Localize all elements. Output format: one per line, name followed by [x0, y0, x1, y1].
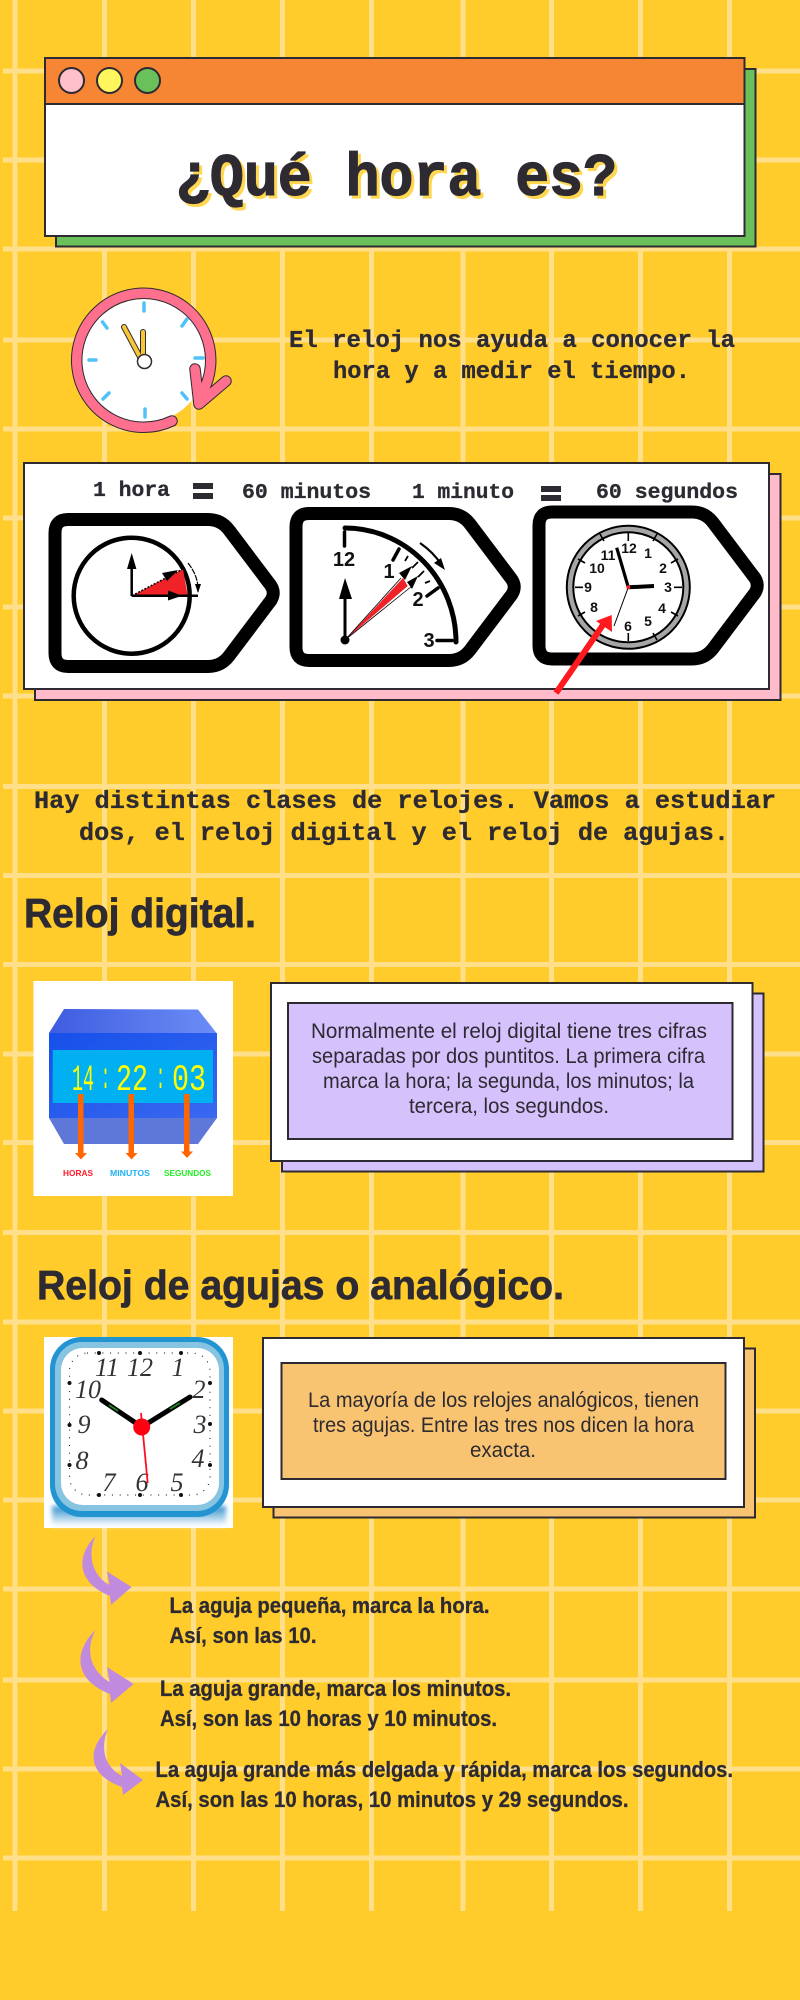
text: hour hand: La aguja pequeña, marca la hora. [170, 1593, 490, 1618]
diagram: one minute clock: 1 [644, 545, 652, 561]
image: analog clock: 12 [127, 1353, 153, 1382]
diagram: one minute clock: 11 [601, 547, 616, 563]
image: analog clock: 4 [192, 1444, 204, 1473]
text: second hand: La aguja grande más delgada y rápida, marca los segundos. [156, 1757, 733, 1782]
title: ¿Qué hora es? [176, 146, 617, 214]
text: analog description: exacta. [470, 1439, 536, 1462]
text block: intro: hora y a medir el tiempo. [333, 359, 690, 386]
window buttons [59, 68, 160, 93]
image: analog clock: 1 [172, 1353, 184, 1382]
image: analog clock: 6 [136, 1468, 148, 1497]
window body [45, 58, 744, 236]
text: minute hand: La aguja grande, marca los minutos. [160, 1676, 511, 1701]
text: minute hand [160, 1676, 511, 1731]
image: digital clock: 03 [172, 1060, 206, 1102]
label: 60 minutos: 60 minutos [242, 481, 371, 505]
diagram: five minutes clock: 2 [412, 589, 424, 611]
diagram: one minute clock: 12 [621, 540, 637, 556]
text: analog description: tres agujas. Entre las tres nos dicen la hora [313, 1414, 694, 1437]
diagram: one minute clock: 3 [664, 579, 672, 595]
text block: intro [289, 328, 735, 386]
image: digital clock: : [156, 1058, 165, 1100]
diagram: one minute clock: 9 [584, 579, 592, 595]
heading: reloj de agujas: Reloj de agujas o analógico. [37, 1262, 564, 1308]
image: analog clock: 9 [78, 1410, 90, 1439]
text: second hand: Así, son las 10 horas, 10 minutos y 29 segundos. [156, 1787, 628, 1812]
label: 1 minuto: 1 minuto [412, 481, 514, 505]
text: digital description: Normalmente el reloj digital tiene tres cifras [311, 1020, 707, 1043]
diagram: five minutes clock [296, 514, 514, 660]
arrow: second hand [94, 1729, 143, 1795]
heading: reloj digital: Reloj digital. [24, 890, 256, 936]
panel shadow [35, 474, 780, 700]
image: analog clock: 10 [75, 1375, 101, 1404]
text: analog description: La mayoría de los relojes analógicos, tienen [308, 1389, 699, 1412]
panel body [24, 463, 769, 689]
text: digital description: marca la hora; la segunda, los minutos; la [323, 1070, 694, 1093]
diagram: one minute clock: 4 [658, 600, 666, 616]
diagram: one hour clock [55, 520, 273, 666]
text: digital description: tercera, los segundos. [409, 1095, 609, 1118]
text: second hand [156, 1757, 733, 1812]
image: digital clock: HORAS [63, 1168, 93, 1178]
image: digital clock: 22 [116, 1060, 148, 1102]
window title bar [45, 58, 744, 104]
label: 1 hora: 1 hora [93, 479, 170, 503]
equals sign [541, 486, 561, 501]
arrow: minute hand [80, 1630, 134, 1703]
text: hour hand [170, 1593, 490, 1648]
label: 60 segundos: 60 segundos [596, 481, 738, 505]
panel: title window [45, 58, 756, 246]
text: digital description [311, 1020, 707, 1118]
image: analog clock: 2 [192, 1375, 206, 1404]
diagram: five minutes clock: 3 [423, 630, 435, 652]
panel: digital description [271, 983, 764, 1172]
diagram: one minute clock: 10 [589, 560, 605, 576]
diagram: one minute clock: 5 [644, 613, 652, 629]
text: analog description [308, 1389, 699, 1462]
image: analog clock: 7 [102, 1468, 116, 1497]
diagram: one minute clock [539, 512, 757, 693]
image: digital clock: 14 [72, 1060, 94, 1102]
equals sign [193, 483, 213, 499]
text block: clock types: dos, el reloj digital y el reloj de agujas. [79, 819, 729, 848]
image: analog clock: 3 [192, 1410, 206, 1439]
text block: clock types: Hay distintas clases de relojes. Vamos a estudiar [34, 787, 776, 816]
diagram: one minute clock: 8 [590, 599, 598, 615]
diagram: one minute clock: 6 [624, 618, 632, 634]
text: hour hand: Así, son las 10. [170, 1623, 316, 1648]
image: analog clock: 8 [76, 1446, 88, 1475]
panel: time equivalences [24, 463, 780, 700]
image: digital clock: SEGUNDOS [164, 1168, 211, 1178]
text block: clock types [34, 787, 776, 848]
window shadow [56, 69, 756, 246]
text: digital description: separadas por dos puntitos. La primera cifra [312, 1045, 705, 1068]
text: minute hand: Así, son las 10 horas y 10 minutos. [160, 1706, 497, 1731]
diagram: one minute clock: 2 [659, 560, 667, 576]
text block: intro: El reloj nos ayuda a conocer la [289, 328, 735, 355]
image: analog clock: 11 [95, 1353, 119, 1382]
arrow: hour hand [82, 1536, 132, 1605]
image: digital clock: MINUTOS [110, 1168, 150, 1178]
icon: clock with arrow [77, 293, 226, 427]
image: analog clock: 5 [170, 1468, 184, 1497]
diagram: five minutes clock: 1 [383, 561, 395, 583]
image: digital clock [34, 981, 233, 1196]
image: analog clock [44, 1337, 233, 1528]
panel: analog description [263, 1338, 755, 1518]
image: digital clock: : [101, 1058, 110, 1100]
diagram: five minutes clock: 12 [333, 549, 355, 571]
